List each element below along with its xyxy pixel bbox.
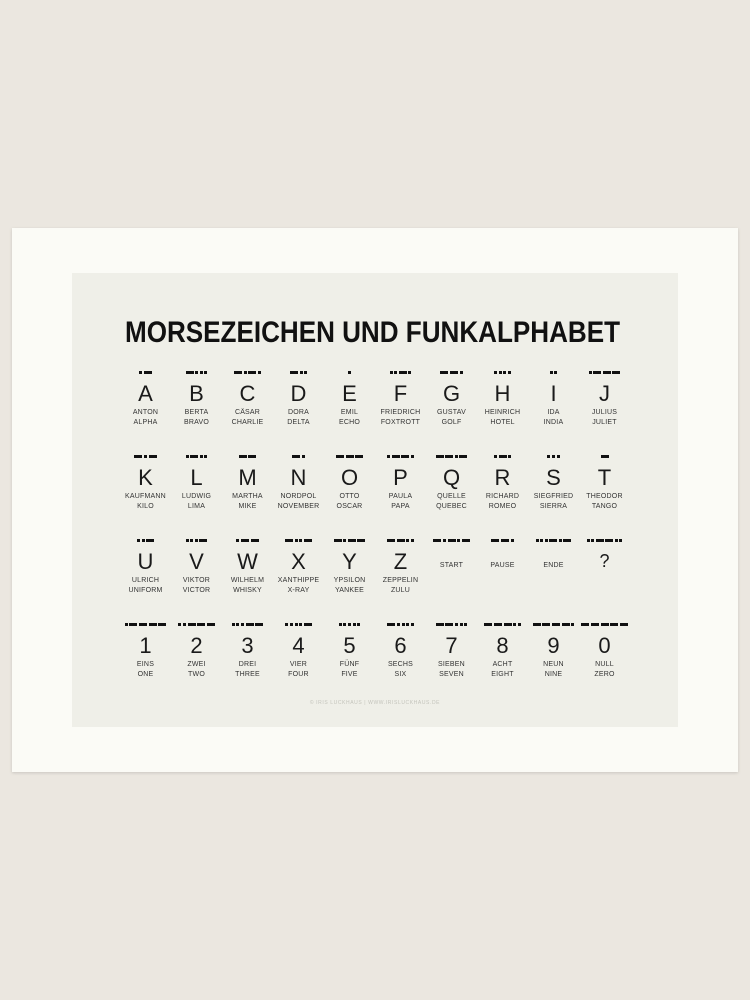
grid: letters and numbers: NINE [545, 671, 562, 678]
grid: letters and numbers: SIEGFRIED [534, 493, 573, 500]
grid: letters and numbers: ? [599, 551, 610, 571]
grid: letters and numbers: ANTON [133, 409, 158, 416]
grid: letters and numbers: FIVE [341, 671, 358, 678]
grid: letters and numbers: OTTO [339, 493, 360, 500]
grid: letters and numbers: E [342, 381, 357, 406]
grid: letters and numbers: ZERO [594, 671, 615, 678]
grid: letters and numbers: F [394, 381, 407, 406]
grid: letters and numbers: QUEBEC [436, 503, 467, 510]
wall frame [12, 228, 738, 772]
grid: letters and numbers: 1 [139, 633, 152, 658]
grid: letters and numbers: CHARLIE [232, 419, 263, 426]
grid: letters and numbers: 3 [241, 633, 254, 658]
grid: letters and numbers: I [550, 381, 557, 406]
grid: letters and numbers: O [341, 465, 358, 490]
grid: letters and numbers: Y [342, 549, 357, 574]
grid: letters and numbers: J [599, 381, 610, 406]
grid: letters and numbers: L [190, 465, 203, 490]
grid: letters and numbers [125, 371, 628, 678]
grid: letters and numbers: BERTA [185, 409, 208, 416]
row 3 [128, 539, 163, 594]
grid: letters and numbers: EINS [137, 661, 154, 668]
grid: letters and numbers: PAUSE [490, 562, 515, 569]
grid: letters and numbers: TWO [188, 671, 205, 678]
grid: letters and numbers: JULIUS [592, 409, 617, 416]
grid: letters and numbers: GOLF [442, 419, 461, 426]
grid: letters and numbers: 0 [598, 633, 611, 658]
grid: letters and numbers: V [189, 549, 204, 574]
grid: letters and numbers: YANKEE [335, 587, 364, 594]
grid: letters and numbers: ECHO [339, 419, 360, 426]
grid: letters and numbers: 7 [445, 633, 458, 658]
grid: letters and numbers: START [440, 562, 463, 569]
grid: letters and numbers: PAULA [389, 493, 412, 500]
grid: letters and numbers: 8 [496, 633, 509, 658]
grid: letters and numbers: INDIA [544, 419, 563, 426]
grid: letters and numbers: NORDPOL [280, 493, 317, 500]
grid: letters and numbers: ONE [138, 671, 153, 678]
grid: letters and numbers: IDA [547, 409, 560, 416]
grid: letters and numbers: Z [394, 549, 407, 574]
grid: letters and numbers: 4 [292, 633, 305, 658]
grid: letters and numbers: DELTA [287, 419, 310, 426]
grid: letters and numbers: ENDE [543, 562, 564, 569]
grid: letters and numbers: QUELLE [437, 493, 466, 500]
grid: letters and numbers: PAPA [391, 503, 410, 510]
grid: letters and numbers: NOVEMBER [278, 503, 319, 510]
grid: letters and numbers: OSCAR [337, 503, 362, 510]
grid: letters and numbers: DORA [288, 409, 309, 416]
grid: letters and numbers: FÜNF [340, 661, 359, 668]
grid: letters and numbers: THREE [235, 671, 260, 678]
grid: letters and numbers: S [546, 465, 561, 490]
grid: letters and numbers: VICTOR [183, 587, 210, 594]
grid: letters and numbers: MIKE [239, 503, 256, 510]
grid: letters and numbers: CÄSAR [235, 409, 260, 416]
grid: letters and numbers: ZWEI [187, 661, 206, 668]
grid: letters and numbers: W [237, 549, 258, 574]
grid: letters and numbers: TANGO [592, 503, 617, 510]
grid: letters and numbers: SIEBEN [438, 661, 465, 668]
grid: letters and numbers: KILO [137, 503, 154, 510]
grid: letters and numbers: ZEPPELIN [383, 577, 418, 584]
grid: letters and numbers: X-RAY [288, 587, 309, 594]
grid: letters and numbers: G [443, 381, 460, 406]
grid: letters and numbers: B [189, 381, 204, 406]
grid: letters and numbers: C [240, 381, 255, 406]
row 1 [132, 371, 158, 426]
grid: letters and numbers: EIGHT [491, 671, 514, 678]
grid: letters and numbers: THEODOR [586, 493, 623, 500]
grid: letters and numbers: MARTHA [232, 493, 263, 500]
grid: letters and numbers: WHISKY [233, 587, 262, 594]
grid: letters and numbers: 5 [343, 633, 356, 658]
grid: letters and numbers: FRIEDRICH [381, 409, 420, 416]
grid: letters and numbers: JULIET [592, 419, 617, 426]
grid: letters and numbers: P [393, 465, 408, 490]
grid: letters and numbers: VIER [290, 661, 307, 668]
grid: letters and numbers: XANTHIPPE [278, 577, 319, 584]
grid: letters and numbers: ALPHA [134, 419, 157, 426]
grid: letters and numbers: A [138, 381, 153, 406]
grid: letters and numbers: ZULU [391, 587, 410, 594]
grid: letters and numbers: HEINRICH [485, 409, 520, 416]
grid: letters and numbers: ULRICH [132, 577, 159, 584]
grid: letters and numbers: WILHELM [231, 577, 264, 584]
grid: letters and numbers: KAUFMANN [125, 493, 166, 500]
grid: letters and numbers: SIERRA [540, 503, 567, 510]
grid: letters and numbers: K [138, 465, 153, 490]
grid: letters and numbers: BRAVO [184, 419, 209, 426]
grid: letters and numbers: GUSTAV [437, 409, 466, 416]
grid: letters and numbers: NULL [595, 661, 614, 668]
grid: letters and numbers: N [291, 465, 306, 490]
grid: letters and numbers: LUDWIG [182, 493, 211, 500]
grid: letters and numbers: HOTEL [490, 419, 515, 426]
row 2 [125, 455, 166, 510]
grid: letters and numbers: YPSILON [334, 577, 365, 584]
grid: letters and numbers: UNIFORM [128, 587, 163, 594]
row 4: numbers [125, 623, 166, 678]
grid: letters and numbers: U [138, 549, 153, 574]
grid: letters and numbers: H [495, 381, 510, 406]
grid: letters and numbers: VIKTOR [183, 577, 210, 584]
grid: letters and numbers: T [598, 465, 611, 490]
grid: letters and numbers: ROMEO [489, 503, 516, 510]
grid: letters and numbers: Q [443, 465, 460, 490]
grid: letters and numbers: SEVEN [439, 671, 464, 678]
grid: letters and numbers: R [495, 465, 510, 490]
grid: letters and numbers: LIMA [188, 503, 205, 510]
grid: letters and numbers: 9 [547, 633, 560, 658]
grid: letters and numbers: FOUR [288, 671, 309, 678]
panel: poster [72, 273, 678, 727]
grid: letters and numbers: SIX [395, 671, 406, 678]
grid: letters and numbers: D [291, 381, 306, 406]
grid: letters and numbers: NEUN [543, 661, 564, 668]
grid: letters and numbers: 6 [394, 633, 407, 658]
grid: letters and numbers: FOXTROTT [381, 419, 420, 426]
grid: letters and numbers: X [291, 549, 306, 574]
grid: letters and numbers: 2 [190, 633, 203, 658]
grid: letters and numbers: RICHARD [486, 493, 519, 500]
footer credit: © IRIS LUCKHAUS | WWW.IRISLUCKHAUS.DE [310, 700, 440, 706]
grid: letters and numbers: M [238, 465, 257, 490]
grid: letters and numbers: EMIL [341, 409, 358, 416]
grid: letters and numbers: ACHT [493, 661, 512, 668]
grid: letters and numbers: SECHS [388, 661, 413, 668]
grid: letters and numbers: DREI [239, 661, 256, 668]
